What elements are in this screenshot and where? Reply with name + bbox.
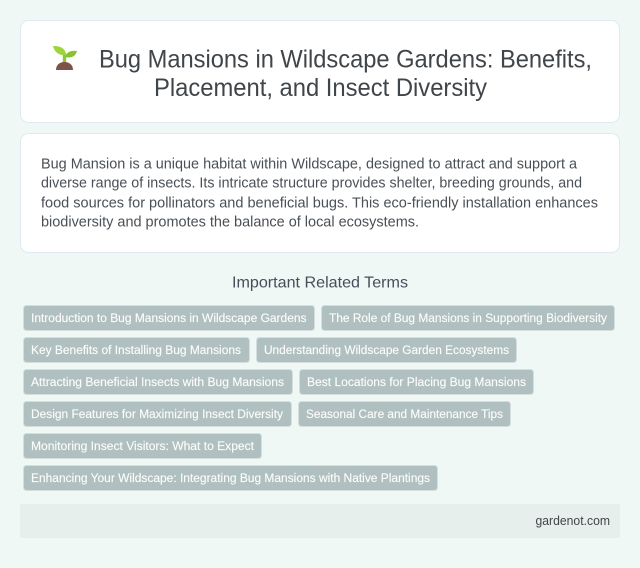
chip <box>298 402 510 426</box>
chip <box>300 370 534 394</box>
chip: Introduction to Bug Mansions in Wildscape Gardens <box>31 311 306 325</box>
chip <box>24 402 292 426</box>
chip <box>24 434 262 458</box>
description text: diverse range of insects. Its intricate structure provides shelter, breeding grounds, and <box>41 176 582 192</box>
chip: Best Locations for Placing Bug Mansions <box>307 375 526 389</box>
chip <box>322 306 614 330</box>
description text: biodiversity and promotes the balance of local ecosystems. <box>41 214 419 230</box>
chip <box>24 370 292 394</box>
title <box>99 46 592 102</box>
chip: Seasonal Care and Maintenance Tips <box>306 407 503 421</box>
heading: related terms: Important Related Terms <box>232 274 408 292</box>
footer <box>20 504 620 538</box>
chip <box>24 338 250 362</box>
footer: gardenot.com <box>536 514 610 528</box>
chip: Enhancing Your Wildscape: Integrating Bug Mansions with Native Plantings <box>31 471 430 485</box>
chip: Key Benefits of Installing Bug Mansions <box>31 343 241 357</box>
description text: food sources for pollinators and beneficial bugs. This eco-friendly installation enhances <box>41 195 598 211</box>
chip <box>24 306 314 330</box>
title: Bug Mansions in Wildscape Gardens: Benefits, <box>99 46 592 74</box>
chip <box>24 466 438 490</box>
chip: Understanding Wildscape Garden Ecosystems <box>264 343 509 357</box>
icon: seedling <box>53 46 77 70</box>
related terms chips <box>24 306 614 490</box>
description text: Bug Mansion is a unique habitat within Wildscape, designed to attract and support a <box>41 156 577 172</box>
description text <box>41 156 598 230</box>
chip: Design Features for Maximizing Insect Diversity <box>31 407 284 421</box>
chip <box>256 338 516 362</box>
title: Placement, and Insect Diversity <box>154 74 487 102</box>
chip: Monitoring Insect Visitors: What to Expect <box>31 439 255 453</box>
chip: Attracting Beneficial Insects with Bug Mansions <box>31 375 284 389</box>
panel: title card <box>20 20 620 122</box>
panel: description <box>20 134 620 252</box>
chip: The Role of Bug Mansions in Supporting Biodiversity <box>329 311 608 325</box>
